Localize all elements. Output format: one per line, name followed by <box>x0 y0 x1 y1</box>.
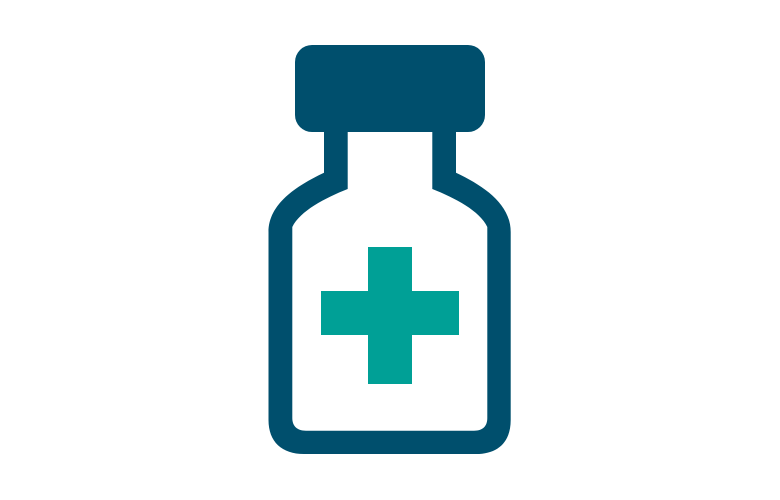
bottle cap <box>295 45 485 132</box>
bottle body outline <box>268 125 511 454</box>
medical cross <box>321 247 459 384</box>
